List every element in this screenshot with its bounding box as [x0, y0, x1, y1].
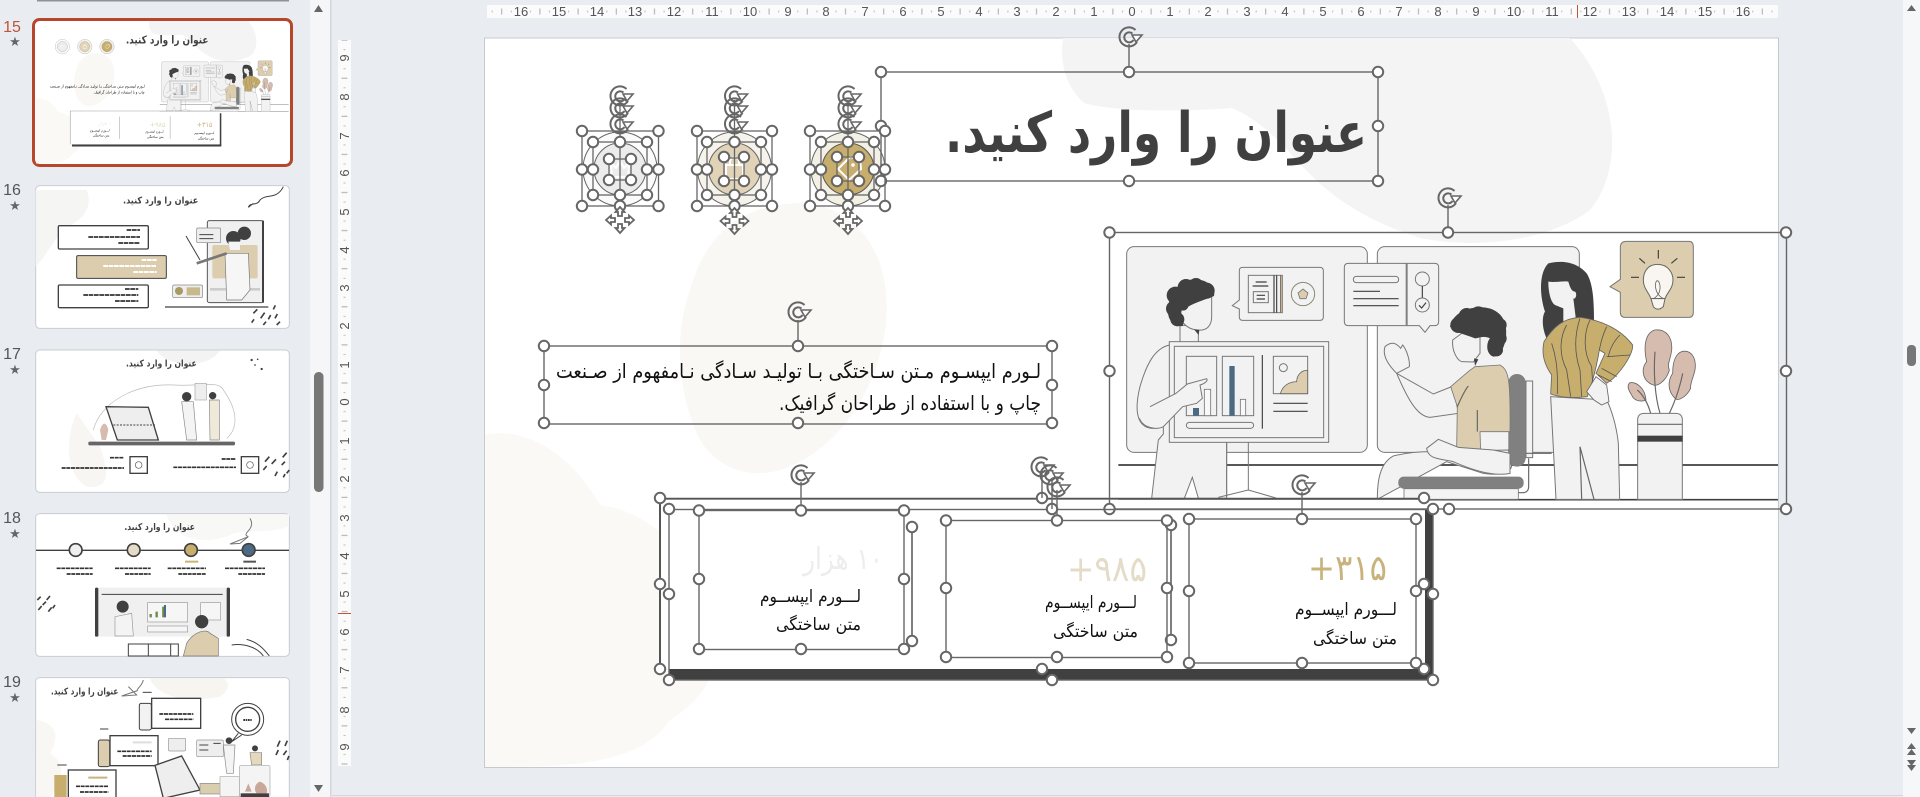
body text: لـورم ایپسـوم مـتن سـاختگی بـا تولیـد سـادگی نـامفهوم از صـنعت	[556, 359, 1041, 384]
plant with leaves	[1628, 330, 1695, 413]
vertical ruler: 1	[337, 361, 352, 369]
thumbnail 15 (selected)	[34, 20, 292, 166]
chair seat	[1398, 477, 1524, 499]
speech bubble: light bulb	[1610, 241, 1693, 317]
stats table frame	[660, 499, 1433, 680]
vertical ruler: 3	[337, 514, 352, 522]
title: عنوان را وارد کنید.	[945, 101, 1367, 166]
horizontal ruler: 4	[1281, 4, 1289, 19]
stat: 985	[1045, 549, 1147, 642]
horizontal ruler	[487, 4, 1778, 19]
presenter	[1137, 278, 1227, 499]
background blob: top right	[1062, 38, 1612, 243]
stat: 315	[1295, 548, 1397, 649]
horizontal ruler: 16	[1736, 4, 1750, 19]
slide numbers	[3, 19, 21, 706]
horizontal ruler: 8	[822, 4, 830, 19]
horizontal ruler: 11	[1545, 4, 1559, 19]
cell selection: 985	[941, 515, 1172, 662]
cell selection: 315	[1184, 475, 1421, 668]
horizontal ruler: 12	[1583, 4, 1597, 19]
horizontal ruler: 0	[1128, 4, 1136, 19]
vertical ruler: 5	[337, 590, 352, 598]
horizontal ruler: 9	[784, 4, 792, 19]
vertical ruler: 0	[337, 398, 352, 406]
stat: 10 thousand: لـــورم ایپســوم	[760, 587, 861, 607]
illustration	[1118, 241, 1778, 500]
vertical ruler: 8	[337, 93, 352, 101]
horizontal ruler: 2	[1052, 4, 1060, 19]
horizontal ruler: 1	[1090, 4, 1098, 19]
body text selection box	[539, 302, 1057, 428]
horizontal ruler: 6	[1357, 4, 1365, 19]
stat: 985: ۹۸۵+	[1067, 549, 1147, 590]
vertical ruler: 2	[337, 475, 352, 483]
vertical ruler: 9	[337, 54, 352, 62]
speech bubble: checklist	[1344, 263, 1439, 332]
thumbnail 19	[36, 678, 289, 797]
stat: 315: ۳۱۵+	[1308, 548, 1387, 589]
horizontal ruler: 4	[975, 4, 983, 19]
thumbnail group in zoom units	[36, 186, 289, 797]
stat: 10 thousand: متن ساختگی	[776, 614, 861, 635]
slide numbers: 15	[3, 19, 21, 36]
horizontal ruler: 2	[1204, 4, 1212, 19]
horizontal ruler: 13	[628, 4, 642, 19]
vertical ruler: 6	[337, 169, 352, 177]
monitor stand	[1218, 442, 1276, 498]
thumbnail 19: عنوان را وارد کنید.	[51, 687, 118, 698]
horizontal ruler: 13	[1622, 4, 1636, 19]
slide numbers: ★	[9, 35, 21, 50]
icon selection 3	[805, 86, 890, 234]
vertical ruler: 6	[337, 628, 352, 636]
plant pot	[1637, 413, 1683, 499]
horizontal ruler: 14	[1660, 4, 1674, 19]
slide numbers: 19	[3, 674, 21, 691]
horizontal ruler: 6	[899, 4, 907, 19]
vertical ruler: 7	[337, 666, 352, 674]
cell selection: 10 thousand	[694, 465, 909, 654]
horizontal ruler: 15	[552, 4, 566, 19]
icon circle: crown	[583, 132, 657, 206]
title selection box	[876, 27, 1383, 186]
pointing hand and arm	[1139, 379, 1207, 428]
stat: 315: لـــورم ایپســوم	[1295, 600, 1397, 620]
icon selection 1	[577, 86, 664, 233]
body text: چاپ و با استفاده از طراحان گرافیک.	[779, 391, 1041, 415]
selection handles: slide objects	[539, 27, 1791, 685]
vertical ruler: 7	[337, 132, 352, 140]
horizontal ruler: 5	[1319, 4, 1327, 19]
horizontal ruler: 9	[1472, 4, 1480, 19]
horizontal ruler: 10	[1507, 4, 1521, 19]
main scrollbar	[1903, 0, 1920, 797]
vertical ruler: 9	[337, 743, 352, 751]
back panel left	[1127, 247, 1367, 452]
horizontal ruler: 16	[514, 4, 528, 19]
horizontal ruler: 8	[1434, 4, 1442, 19]
body text	[556, 359, 1041, 415]
vertical ruler	[337, 40, 352, 766]
horizontal ruler: 7	[861, 4, 869, 19]
back panel right	[1377, 247, 1579, 452]
thumbnail 16	[36, 186, 289, 328]
thumbnail 17	[36, 350, 289, 492]
vertical ruler: 1	[337, 437, 352, 445]
vertical ruler: 2	[337, 322, 352, 330]
horizontal ruler: 11	[705, 4, 719, 19]
standing woman	[1541, 262, 1633, 499]
horizontal ruler: 1	[1166, 4, 1174, 19]
stat: 985: لـــورم ایپســوم	[1045, 593, 1137, 613]
vertical ruler: 4	[337, 246, 352, 254]
thumbnail 16: عنوان را وارد کنید.	[123, 195, 198, 206]
previous slide thumbnail edge	[37, 0, 289, 2]
stat: 985: متن ساختگی	[1053, 621, 1138, 642]
slide numbers: 17	[3, 346, 21, 363]
background blob: left cream	[680, 203, 887, 473]
vertical ruler: 3	[337, 284, 352, 292]
seated person	[1377, 306, 1512, 499]
ground line upper	[1118, 462, 1778, 467]
thumbnail 18	[36, 514, 289, 656]
icon circle: price tag	[811, 132, 885, 206]
stat: 10 thousand: ۱۰ هزار	[801, 542, 883, 577]
horizontal ruler: 3	[1243, 4, 1251, 19]
monitor with charts	[1169, 342, 1329, 442]
background blob: lower left cream	[485, 433, 720, 767]
slide numbers: ★	[9, 691, 21, 706]
slide numbers: 18	[3, 510, 21, 527]
horizontal ruler: 5	[937, 4, 945, 19]
vertical ruler: 5	[337, 208, 352, 216]
stat: 315: متن ساختگی	[1313, 628, 1397, 649]
slide canvas	[484, 38, 1778, 768]
horizontal ruler: 3	[1013, 4, 1021, 19]
illustration selection box	[1104, 188, 1791, 514]
icon selection 2	[692, 86, 777, 234]
speech bubble: document	[1232, 267, 1323, 320]
thumbnail 17: عنوان را وارد کنید.	[126, 359, 197, 370]
horizontal ruler: 10	[743, 4, 757, 19]
horizontal ruler: 7	[1395, 4, 1403, 19]
slide numbers: 16	[3, 182, 21, 199]
slide content	[485, 38, 1778, 767]
slide numbers: ★	[9, 199, 21, 214]
vertical ruler: 4	[337, 552, 352, 560]
vertical ruler: 8	[337, 706, 352, 714]
stat: 10 thousand	[760, 542, 883, 635]
icon circle: shopping bag	[698, 132, 772, 206]
thumbnail 18: عنوان را وارد کنید.	[124, 522, 195, 533]
ground line lower	[1118, 497, 1778, 502]
horizontal ruler: 14	[590, 4, 604, 19]
table outer selection boxes	[655, 457, 1438, 685]
slide numbers: ★	[9, 363, 21, 378]
chair back	[1508, 374, 1552, 493]
slide numbers: ★	[9, 527, 21, 542]
horizontal ruler: 15	[1698, 4, 1712, 19]
horizontal ruler: 12	[667, 4, 681, 19]
